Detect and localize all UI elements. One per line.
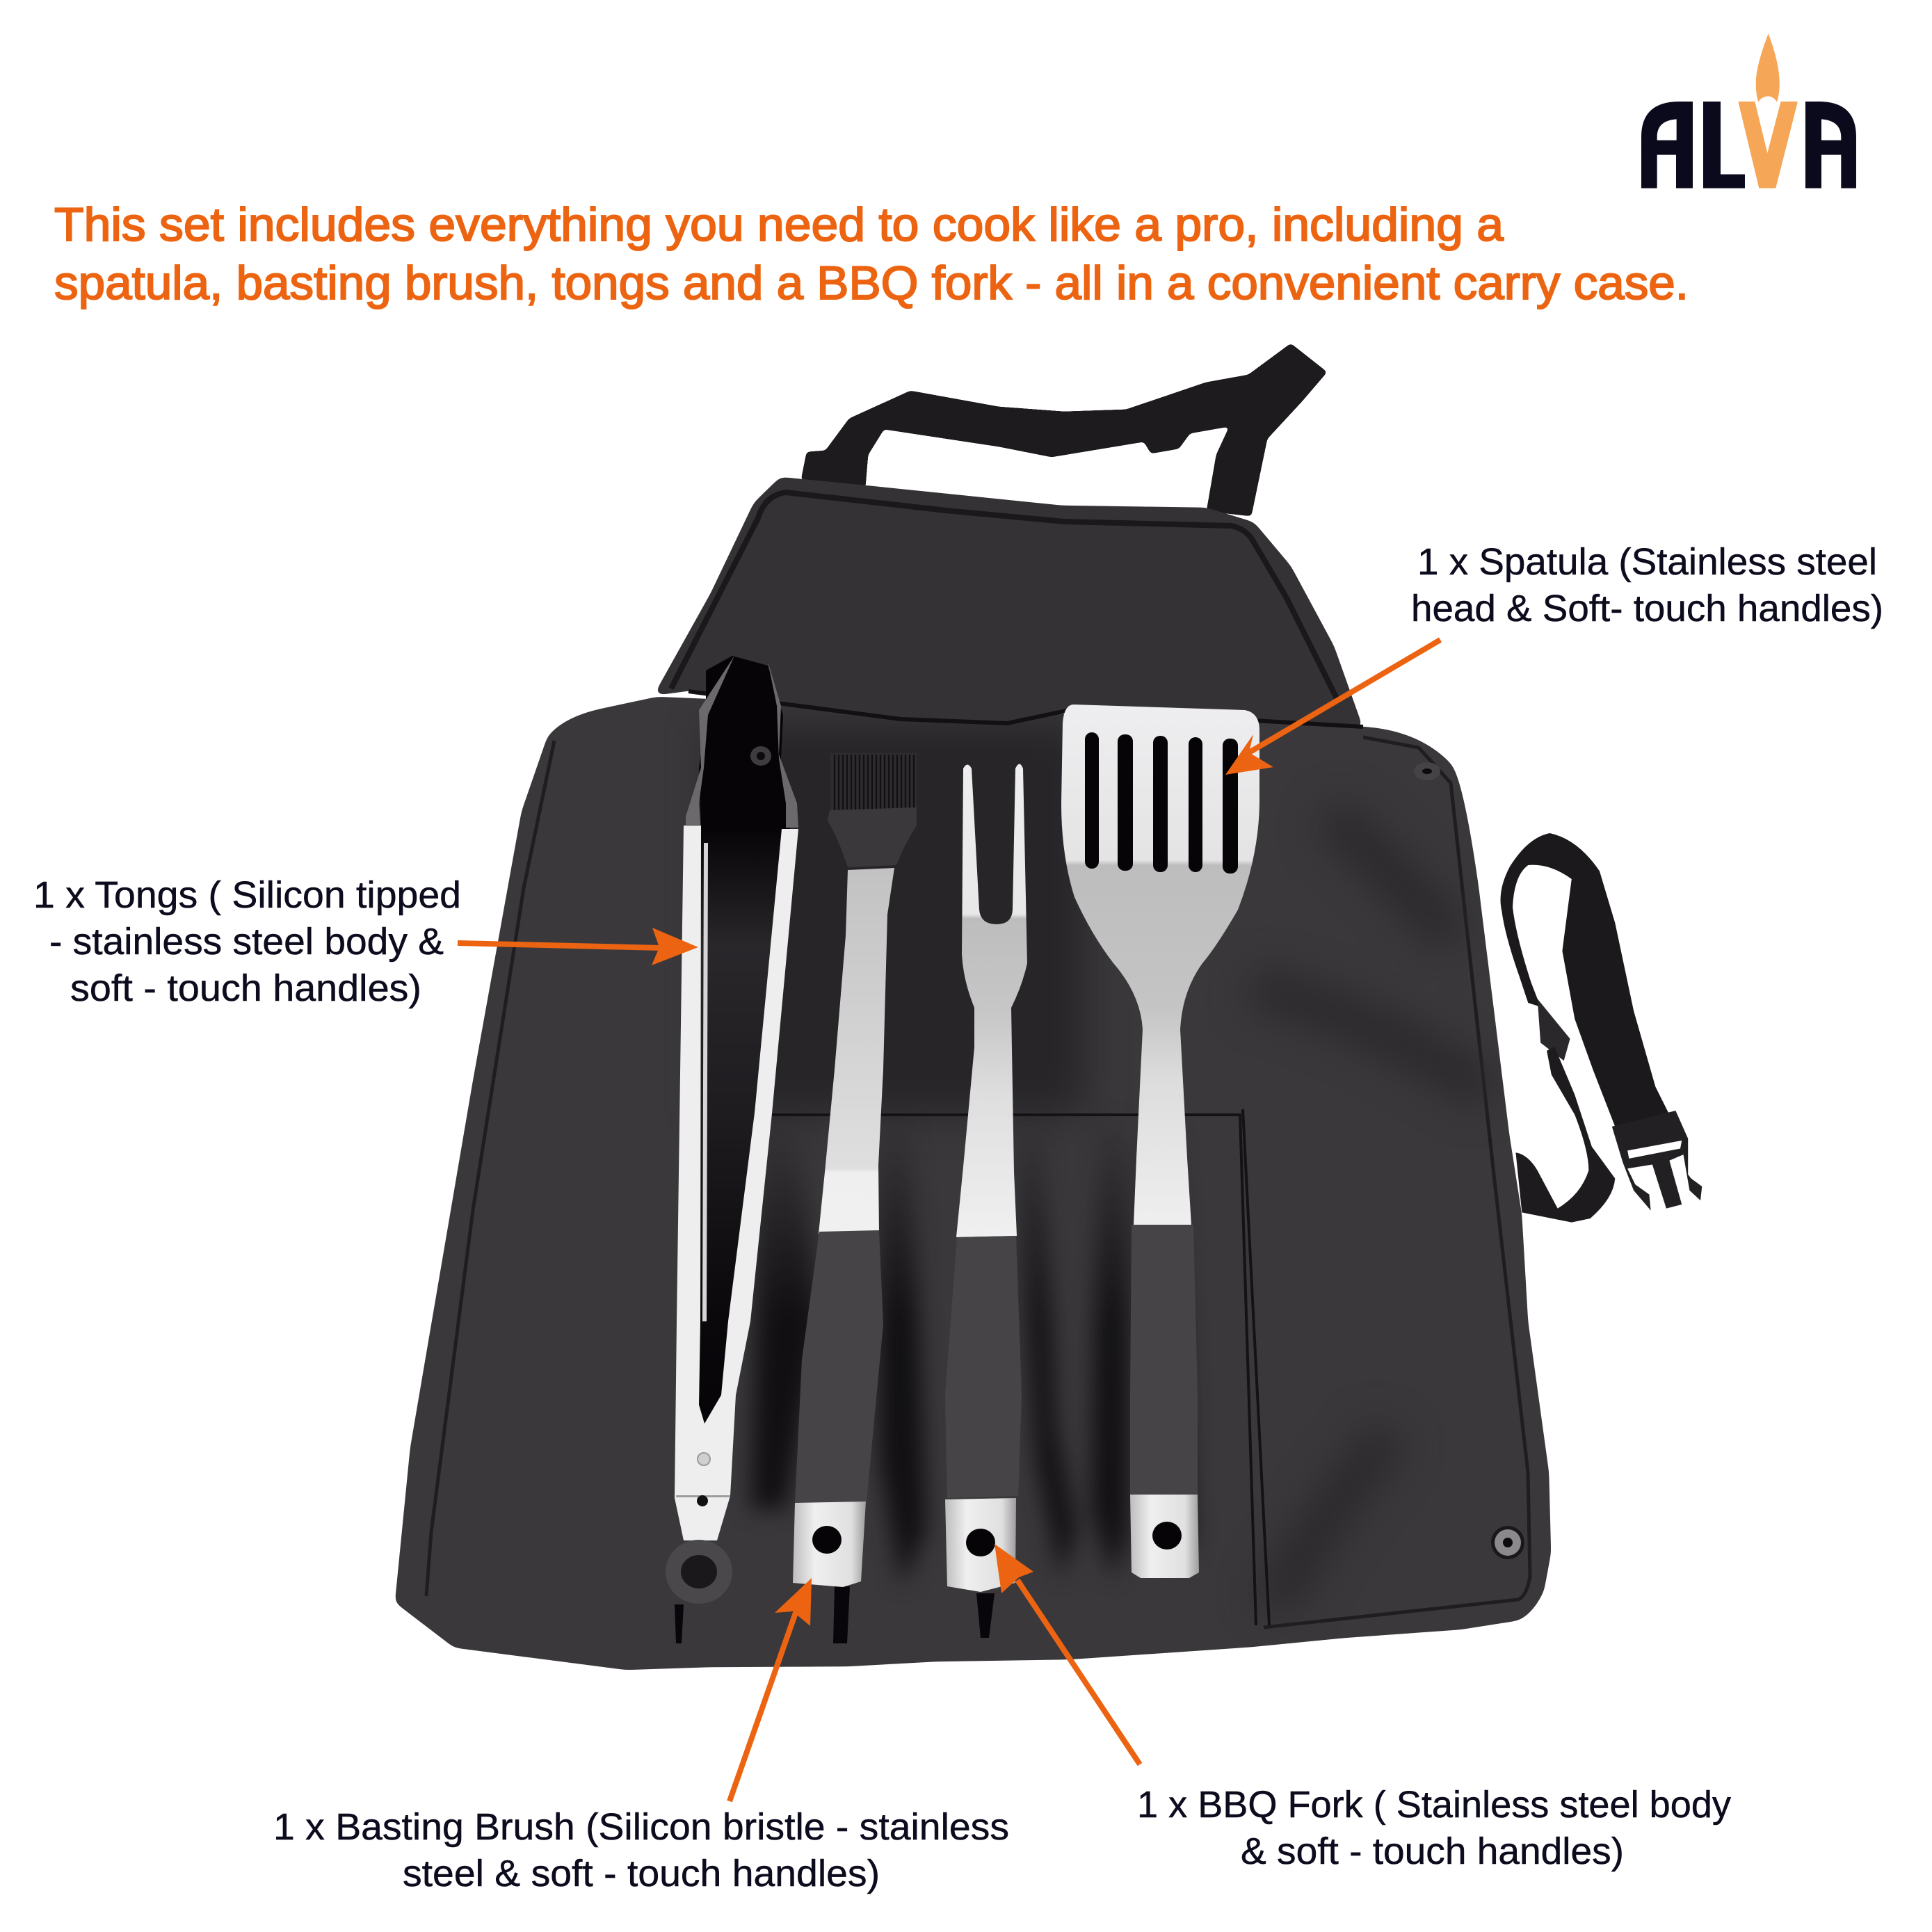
bag: main roll panel: [395, 697, 1551, 1670]
snap rivet near tongs: [750, 746, 771, 766]
logo letters: [1641, 102, 1856, 188]
brush handle: [795, 1230, 883, 1504]
snap rivet top right: [1414, 762, 1440, 780]
tool: spatula: [1061, 705, 1259, 1578]
heading: This set includes everything you need to cook like a pro, including a: [54, 198, 1504, 251]
spatula hole: [1152, 1522, 1182, 1549]
brush hole: [812, 1526, 842, 1554]
arrow: BBQ fork: [995, 1544, 1140, 1764]
brush end cap: [793, 1502, 866, 1587]
flap body: [654, 477, 1363, 728]
snap rivet bottom right: [1491, 1526, 1524, 1559]
tongs arms: [675, 826, 798, 1540]
tool: basting brush: [793, 753, 917, 1587]
label: spatula: head & Soft- touch handles): [1411, 588, 1883, 629]
silicone tip right: [768, 661, 798, 828]
panel body: [395, 697, 1551, 1670]
label: tongs: - stainless steel body &: [49, 921, 444, 963]
gap between arms: [699, 828, 786, 1424]
pocket seam: [772, 1109, 1269, 1625]
logo flame V: [1738, 33, 1798, 188]
arrow: basting brush: [730, 1578, 812, 1801]
heading: [54, 198, 1689, 309]
buckle: [1612, 1111, 1702, 1210]
stitched hem: [426, 737, 1530, 1627]
arrow: spatula: [1225, 640, 1440, 775]
tool: tongs: [673, 656, 798, 1596]
label: tongs: soft - touch handles): [70, 967, 421, 1009]
label: basting brush: 1 x Basting Brush (Silicon bristle - stainless: [273, 1806, 1009, 1848]
arrow: tongs: [458, 928, 698, 965]
tongs jaw shadow: [699, 656, 790, 829]
logo: ALVA: [1641, 33, 1856, 188]
label: basting brush: [273, 1806, 1009, 1894]
flap hem: [671, 492, 1339, 702]
fork hole: [966, 1529, 995, 1556]
label: BBQ fork: [1137, 1784, 1731, 1872]
tongs ring: [673, 1547, 725, 1596]
tool: BBQ fork: [945, 764, 1027, 1592]
brush metal body: [819, 868, 894, 1234]
strap lower loop: [1515, 1047, 1615, 1223]
top carry strap: [801, 344, 1327, 516]
spatula end cap: [1130, 1495, 1199, 1578]
spatula handle: [1130, 1225, 1198, 1495]
stitch wedges under handles: [675, 1586, 995, 1643]
brush bristles: [830, 753, 917, 810]
strap upper loop: [1501, 833, 1669, 1127]
label: spatula: 1 x Spatula (Stainless steel: [1417, 541, 1877, 583]
heading: spatula, basting brush, tongs and a BBQ fork - all in a convenient carry case.: [54, 257, 1689, 309]
adjuster slider: [1538, 999, 1570, 1061]
label: tongs: 1 x Tongs ( Silicon tipped: [33, 874, 461, 916]
label: BBQ fork: 1 x BBQ Fork ( Stainless steel body: [1137, 1784, 1731, 1826]
label: BBQ fork: & soft - touch handles): [1241, 1830, 1624, 1872]
fork handle: [945, 1236, 1022, 1498]
bag: back flap: [654, 477, 1363, 728]
flap fold edge: [689, 691, 1363, 727]
silicone tip left: [686, 656, 734, 825]
tongs pivot and rivets: [676, 1453, 730, 1506]
fabric fold shadows: [709, 723, 1488, 1607]
label: tongs: [33, 874, 461, 1009]
brush silicone head: [828, 807, 917, 867]
label: basting brush: steel & soft - touch handles): [403, 1853, 880, 1894]
fork end cap: [945, 1498, 1016, 1592]
side strap and buckle: [1501, 833, 1702, 1223]
thin inner bar: [702, 843, 708, 1321]
spatula slots: [1085, 732, 1238, 874]
label: spatula: [1411, 541, 1883, 629]
fork metal body: [956, 764, 1027, 1237]
spatula body: [1061, 705, 1259, 1225]
